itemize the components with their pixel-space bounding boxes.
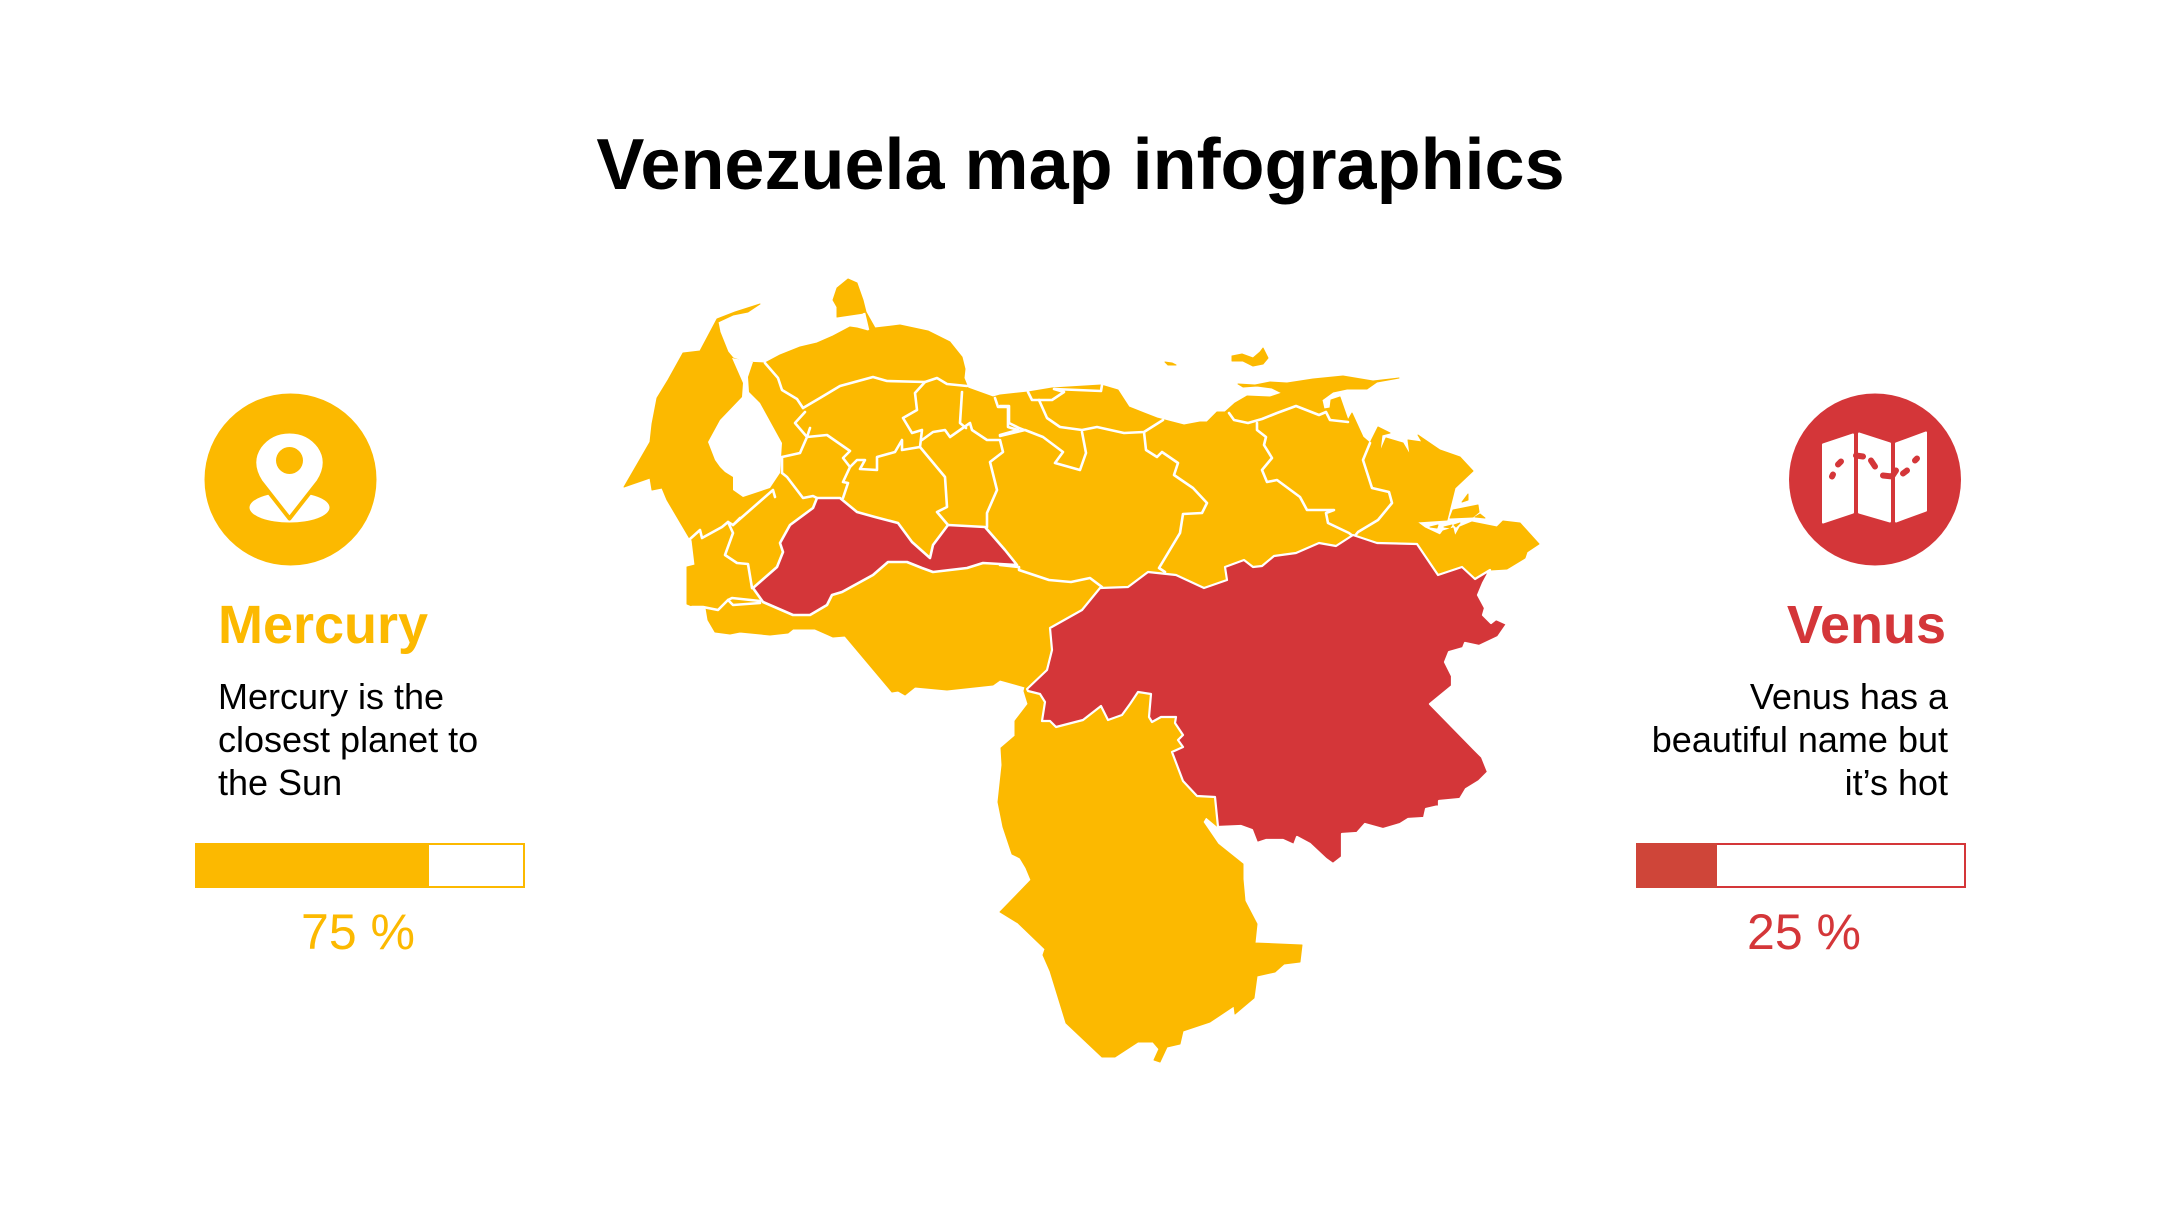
heading: Mercury: Mercury <box>218 595 428 655</box>
red state: east large region <box>1027 535 1507 864</box>
text: Venus description: it’s hot <box>1845 762 1948 803</box>
panel: Venus <box>1636 394 1965 960</box>
red state: west lobes <box>753 498 1017 615</box>
icon: folded map <box>1789 394 1961 566</box>
text: Mercury description: Mercury is the <box>218 676 444 717</box>
progress bar: 25% <box>1636 843 1965 888</box>
text: Mercury description: closest planet to <box>218 719 478 760</box>
text: Venus description: Venus has a <box>1750 676 1949 717</box>
map of Venezuela <box>624 279 1539 1062</box>
map base: yellow states <box>624 279 1539 1062</box>
internal state borders <box>690 363 1392 610</box>
icon: location pin <box>204 394 376 566</box>
title: Venezuela map infographics <box>596 125 1565 205</box>
progress bar: 75% <box>195 843 524 888</box>
text: Venus description: beautiful name but <box>1652 719 1948 760</box>
Lake Maracaibo <box>708 358 782 497</box>
text: Mercury description: the Sun <box>218 762 342 803</box>
panel: Mercury <box>195 394 524 960</box>
heading: Venus: Venus <box>1787 595 1946 655</box>
value: 75 %: 75 % <box>301 904 415 960</box>
white isthmus divider of Paraguana <box>864 313 868 330</box>
value: 25 %: 25 % <box>1747 904 1861 960</box>
